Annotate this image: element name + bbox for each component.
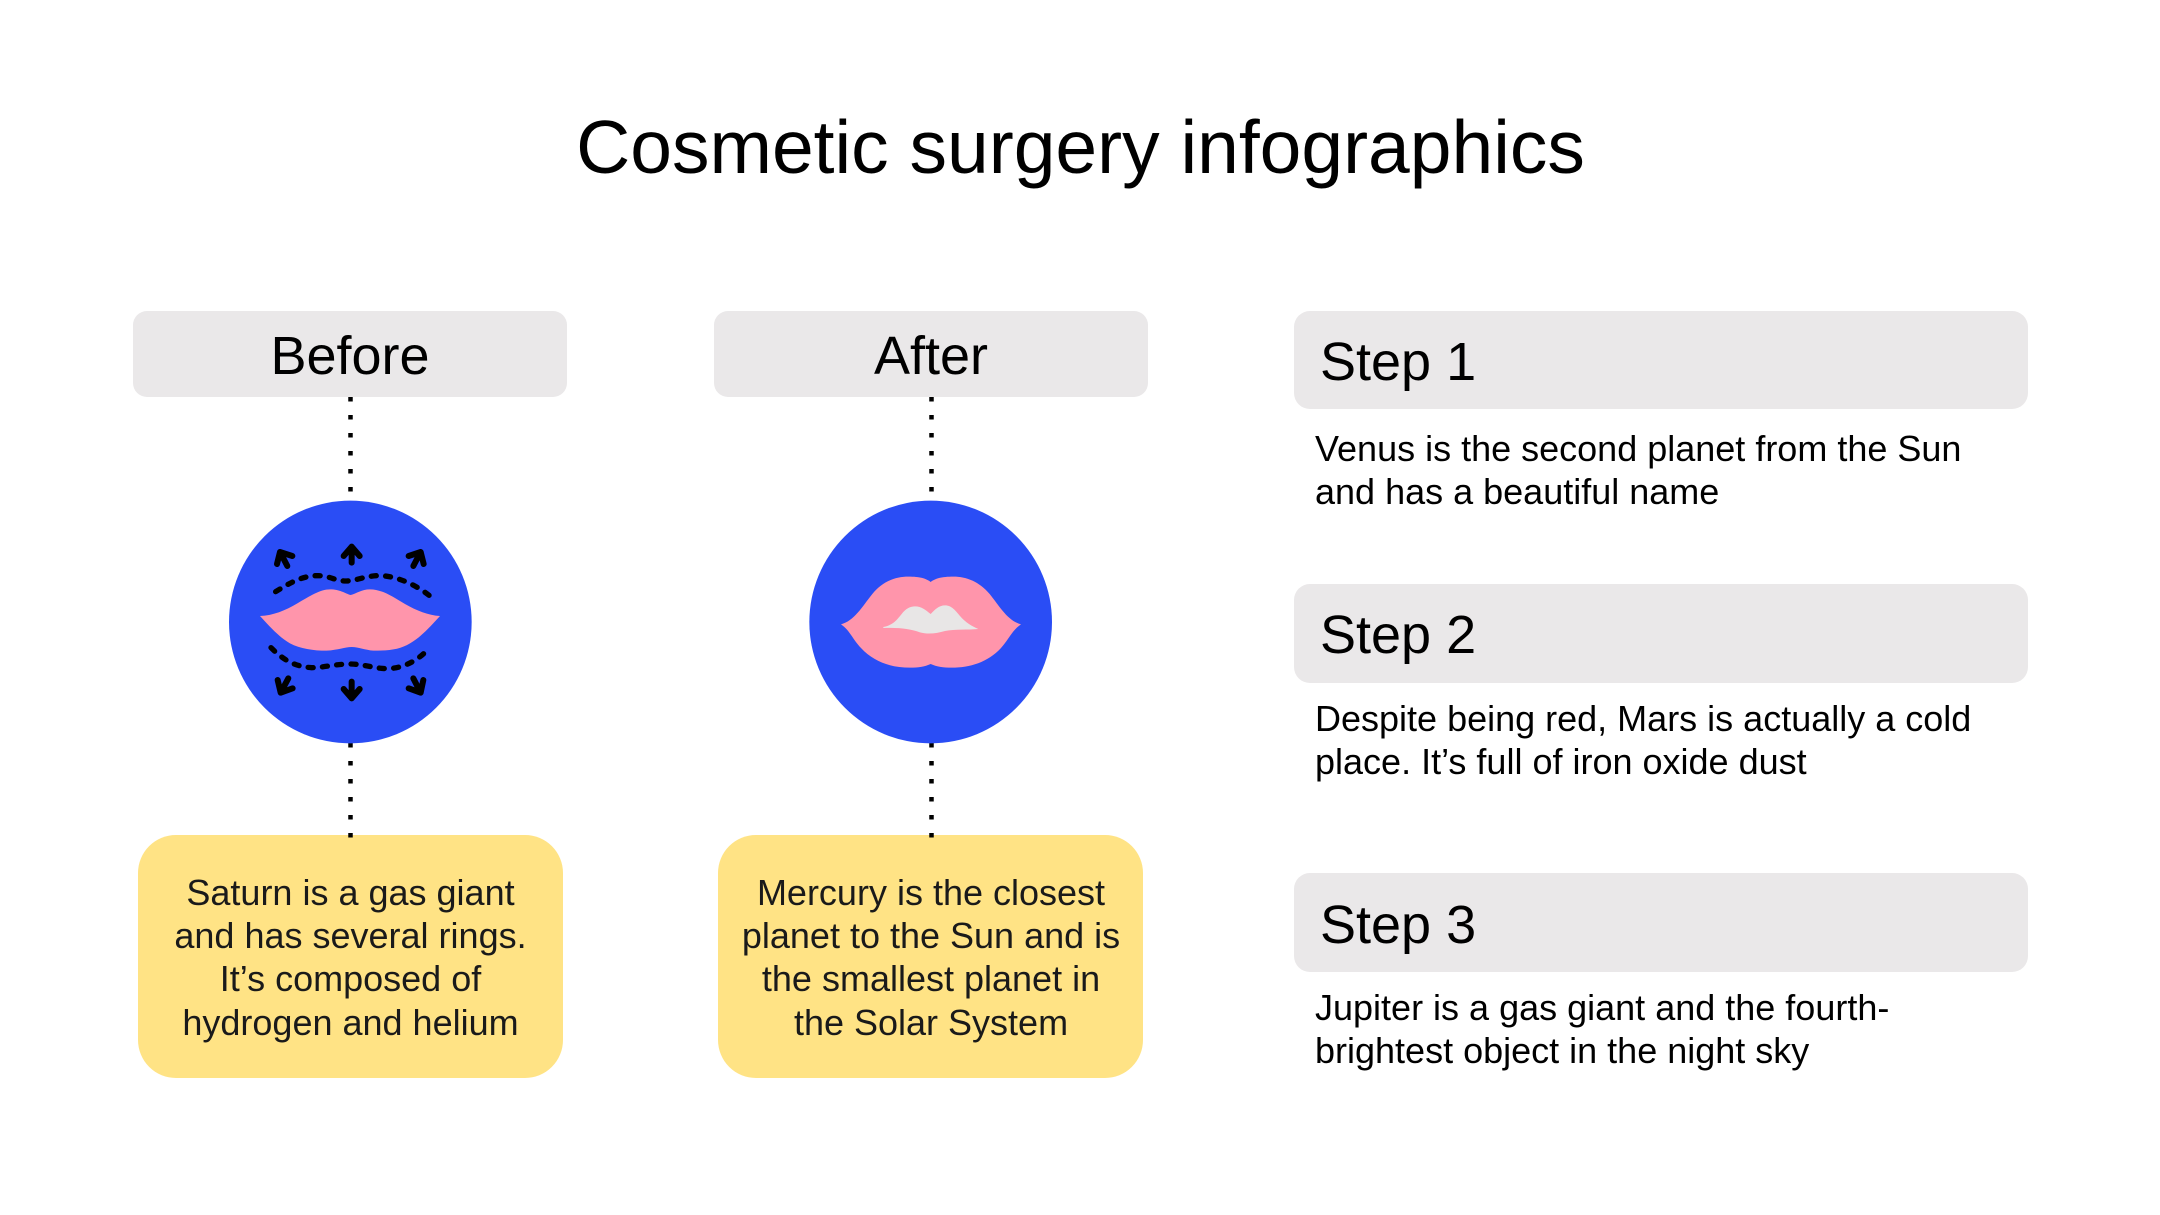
after description card: the Solar System	[794, 1002, 1068, 1043]
before description card: Saturn is a gas giant	[186, 872, 515, 913]
dotted connector: after icon to description	[929, 743, 934, 838]
panel: before column	[133, 311, 567, 1078]
inner mouth	[883, 605, 978, 634]
step 1 text	[1315, 428, 1961, 512]
icon background circle	[229, 501, 472, 743]
step 2 heading	[1294, 584, 2028, 683]
step 3 heading: Step 3	[1320, 895, 1476, 955]
after description card: Mercury is the closest	[757, 872, 1105, 913]
step 1 heading: Step 1	[1320, 332, 1476, 392]
icon background circle	[809, 501, 1052, 743]
icon: lips before surgery with dashed guides and outward arrows	[229, 500, 472, 744]
step 2 text	[1315, 698, 1971, 782]
step 3 text	[1315, 987, 1889, 1071]
before description card: and has several rings.	[174, 915, 527, 956]
step 3 heading	[1294, 873, 2028, 972]
panel: step 3	[1294, 873, 2028, 1071]
panel: after column	[714, 311, 1148, 1078]
after heading: After	[874, 326, 988, 386]
after description card: the smallest planet in	[762, 958, 1100, 999]
panel: step 1	[1294, 311, 2028, 512]
thin lips	[260, 589, 440, 651]
step 3 text: Jupiter is a gas giant and the fourth-	[1315, 987, 1889, 1028]
outward arrows	[277, 547, 424, 698]
dashed guide lines	[271, 576, 431, 669]
dotted connector: before icon to description	[348, 743, 353, 838]
step 2 text: Despite being red, Mars is actually a cold	[1315, 698, 1971, 738]
before heading: Before	[270, 326, 430, 386]
step 2 text: place. It’s full of iron oxide dust	[1315, 741, 1807, 782]
dotted connector: before heading to icon	[348, 397, 353, 492]
before heading	[133, 311, 567, 397]
step 1 heading	[1294, 311, 2028, 409]
step 1 text: Venus is the second planet from the Sun	[1315, 428, 1961, 469]
after description card: planet to the Sun and is	[742, 915, 1120, 956]
icon: fuller lips after surgery	[809, 500, 1052, 744]
before description card: hydrogen and helium	[182, 1002, 519, 1043]
after heading	[714, 311, 1148, 397]
before description card: It’s composed of	[220, 958, 481, 999]
dotted connector: after heading to icon	[929, 397, 934, 492]
step 2 heading: Step 2	[1320, 605, 1476, 665]
after description card	[718, 835, 1143, 1078]
full lips	[841, 577, 1021, 668]
title: Cosmetic surgery infographics	[576, 105, 1585, 189]
step 1 text: and has a beautiful name	[1315, 471, 1719, 512]
step 3 text: brightest object in the night sky	[1315, 1030, 1809, 1071]
panel: step 2	[1294, 584, 2028, 782]
before description card	[138, 835, 563, 1078]
